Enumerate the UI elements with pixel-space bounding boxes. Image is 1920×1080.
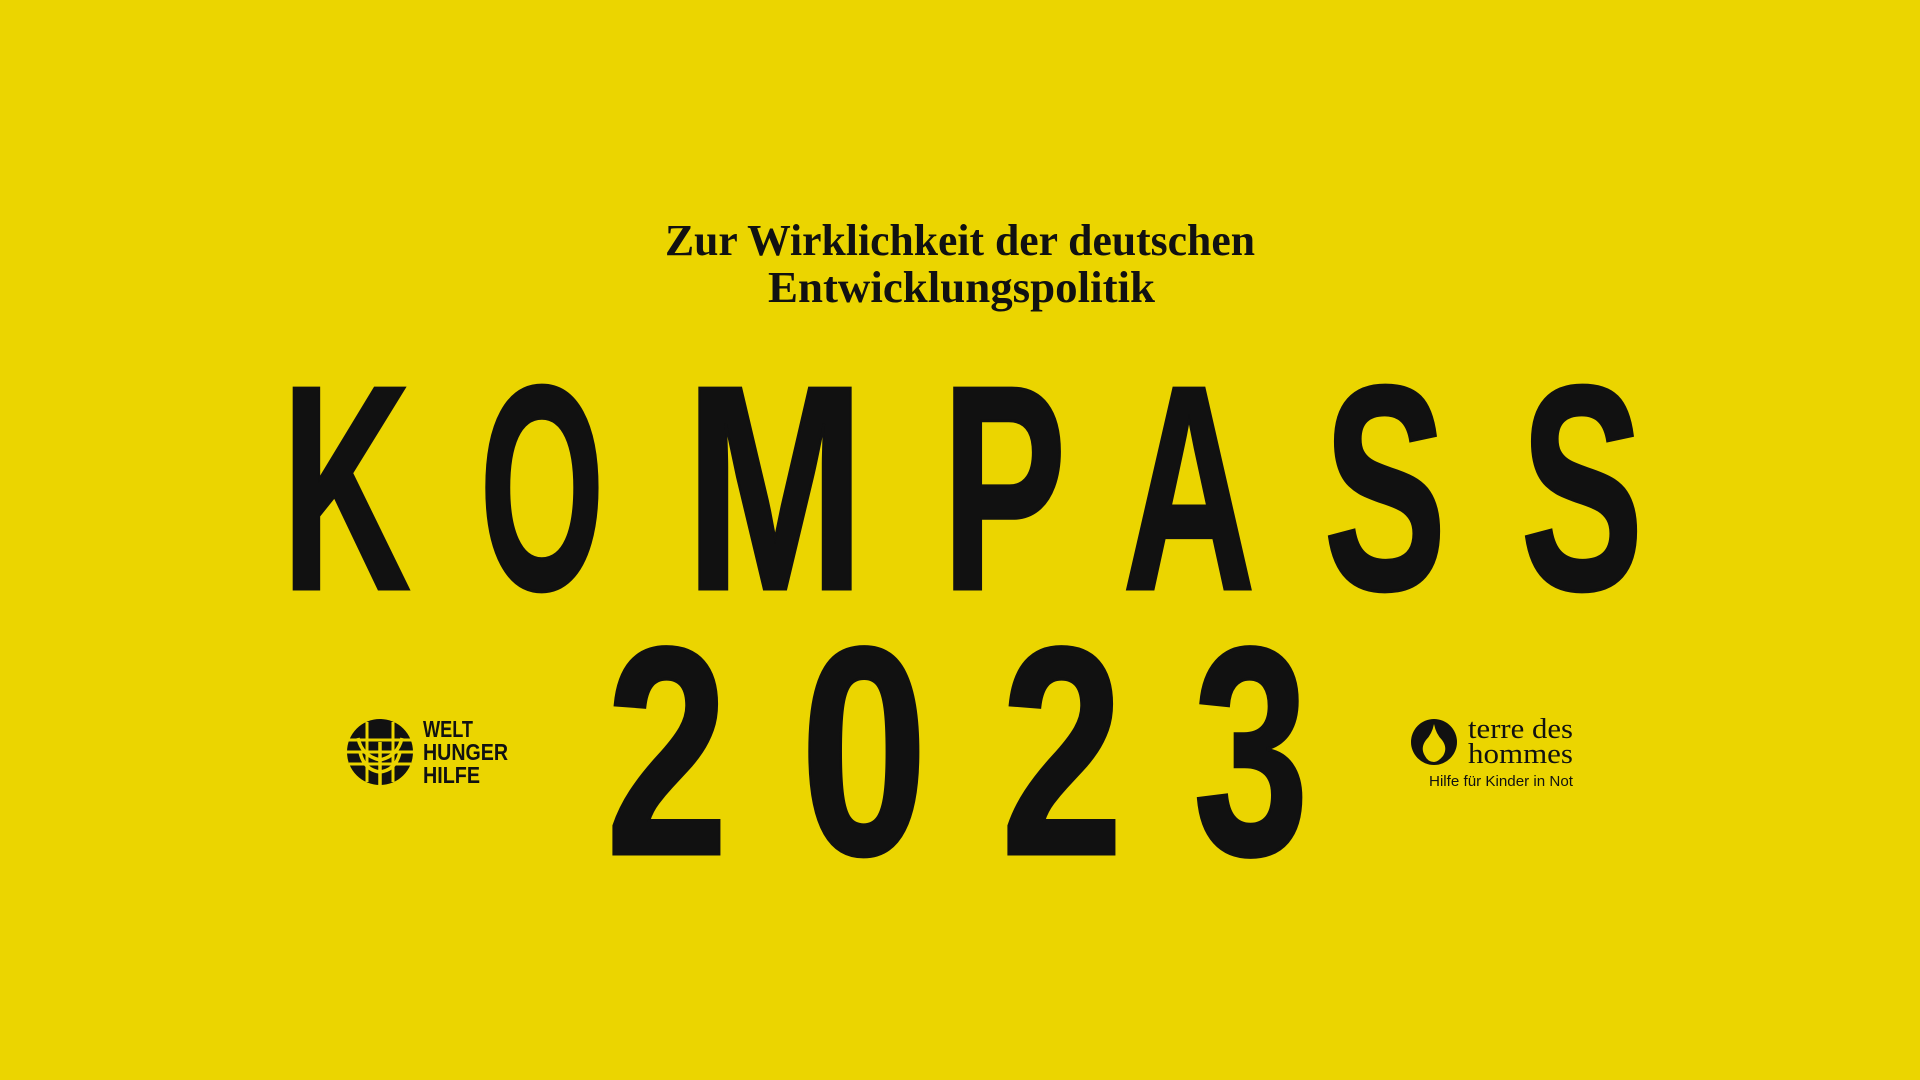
title: KOMPASS: O: [480, 325, 604, 651]
year: 2023: [606, 586, 1309, 918]
title: KOMPASS: A: [1123, 325, 1255, 651]
year: 2023: 0: [800, 586, 928, 918]
title: KOMPASS: P: [942, 325, 1066, 651]
logo: Welthungerhilfe: WELT: [423, 716, 473, 742]
year: 2023: 3: [1193, 586, 1309, 918]
logo: terre des hommes: Hilfe für Kinder in Not: [1429, 773, 1574, 790]
icon: drop circle: [1411, 719, 1457, 765]
title: KOMPASS: K: [282, 326, 410, 652]
year: 2023: 2: [1001, 586, 1123, 918]
subtitle: Entwicklungspolitik: [768, 263, 1156, 312]
logo: terre des hommes: [1411, 714, 1580, 790]
title: KOMPASS: S: [1521, 325, 1643, 651]
subtitle: [665, 216, 1255, 312]
logo: terre des hommes: hommes: [1468, 739, 1573, 770]
icon: wheat circle: [347, 719, 413, 786]
logo: Welthungerhilfe: [347, 716, 514, 788]
logo: Welthungerhilfe: HUNGER: [423, 739, 508, 765]
logo: terre des hommes: terre des: [1468, 714, 1573, 745]
title: KOMPASS: S: [1324, 325, 1446, 651]
title: KOMPASS: [282, 325, 1643, 652]
title: KOMPASS: M: [685, 325, 865, 652]
subtitle: Zur Wirklichkeit der deutschen: [665, 216, 1255, 265]
logo: Welthungerhilfe: HILFE: [423, 762, 480, 788]
year: 2023: 2: [606, 586, 728, 918]
